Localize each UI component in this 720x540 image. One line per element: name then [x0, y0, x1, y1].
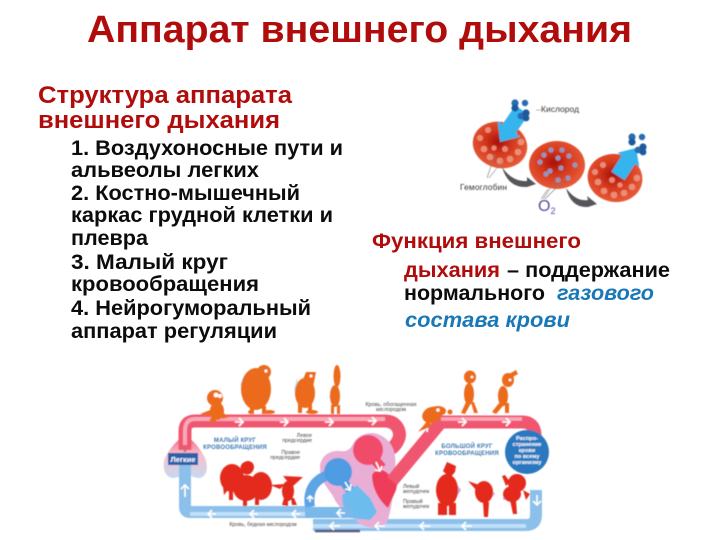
right ventricle	[342, 485, 377, 520]
oxygen molecules top	[511, 99, 530, 121]
list item 2	[71, 182, 333, 250]
orange character 4: thin	[329, 365, 340, 414]
callout: blood distribution: крови	[519, 448, 536, 454]
list item 1: 1. Воздухоносные пути и	[71, 137, 343, 160]
blue pipe: systemic return	[313, 490, 536, 525]
text block: function of external respiration: – поддержание	[507, 259, 670, 282]
orange character 1: sitting	[200, 390, 229, 423]
orange character 5: crawling	[418, 404, 452, 432]
arrow: oxygen leaving cell	[611, 148, 639, 180]
text block: function of external respiration: Функция внешнего	[372, 230, 581, 253]
blue pipe: pulmonary return	[185, 465, 310, 512]
labels: small diagram text	[203, 402, 499, 528]
red pipe: systemic circulation	[392, 422, 535, 481]
red blood cell 2	[529, 141, 585, 189]
heading: structure: внешнего дыхания	[38, 107, 280, 134]
list item 2: каркас грудной клетки и	[71, 204, 333, 227]
arrow: oxygen entering cell	[498, 106, 529, 142]
label: right atrium: предсердие	[270, 455, 300, 461]
red character standing	[436, 462, 461, 515]
label: right ventricle: желудочек	[403, 504, 430, 510]
blue pipe over heart	[305, 507, 353, 518]
label: left atrium: Левое	[297, 433, 312, 439]
red character reaching	[468, 481, 495, 517]
list item 1	[71, 137, 343, 182]
callout: blood distribution: странение	[513, 442, 541, 448]
grey arrow 1	[502, 167, 536, 187]
label: right atrium: Правое	[281, 450, 300, 456]
red pipe: pulmonary circulation	[185, 421, 399, 453]
title: Аппарат внешнего дыхания	[87, 9, 632, 51]
label: pulmonary circulation	[203, 436, 267, 451]
label: left ventricle: Левый	[403, 483, 419, 490]
label: systemic circulation: БОЛЬШОЙ КРУГ	[441, 442, 493, 450]
label: hemoglobin: Гемоглобин	[460, 182, 507, 192]
label: right ventricle: Правый	[403, 498, 423, 505]
list item 4: 4. Нейрогуморальный	[71, 297, 311, 320]
label box: lungs: Легкие	[170, 455, 196, 464]
list item 2: 2. Костно-мышечный	[71, 182, 300, 205]
heading: structure: Структура аппарата	[38, 82, 293, 109]
label: left ventricle: желудочек	[403, 489, 430, 495]
leader lines	[487, 110, 566, 199]
callout: blood distribution: организму	[513, 460, 542, 466]
blue arch	[309, 474, 332, 507]
label: right atrium	[270, 450, 300, 461]
label: O2: O	[538, 198, 550, 215]
left ventricle	[372, 470, 400, 508]
text block: structure of the respiratory apparatus	[38, 82, 343, 343]
label: systemic circulation: КРОВООБРАЩЕНИЯ	[435, 451, 499, 457]
illustration: hemoglobin and oxygen	[460, 99, 647, 216]
flow arrows	[181, 417, 541, 530]
label: pulmonary circulation: КРОВООБРАЩЕНИЯ	[203, 445, 267, 451]
heart body	[320, 433, 395, 527]
text block: function of external respiration: газового	[557, 282, 654, 305]
list item 3: 3. Малый круг	[71, 251, 228, 274]
orange character 2: large	[240, 365, 275, 414]
label: left atrium: предсердие	[282, 438, 312, 444]
callout: blood distribution	[505, 430, 549, 474]
list item 3	[71, 251, 259, 296]
list item 2: плевра	[71, 227, 148, 250]
text block: function of external respiration: состава крови	[405, 309, 570, 332]
list item 4: аппарат регуляции	[71, 320, 277, 343]
callout: blood distribution: Распро-	[516, 436, 538, 442]
label: oxygen-rich blood: кислородом	[376, 407, 406, 413]
orange character 3: walking	[294, 372, 318, 414]
text block: function of external respiration	[372, 230, 670, 332]
label: left ventricle	[403, 483, 430, 495]
text block: function of external respiration: дыхания	[404, 259, 500, 282]
orange character 7: walking	[492, 370, 518, 414]
list item 3: кровообращения	[71, 273, 259, 296]
list item 1: альвеолы легких	[71, 159, 259, 182]
lungs	[164, 430, 207, 478]
label: oxygen: Кислород	[541, 104, 579, 114]
left atrium	[353, 435, 383, 465]
label: left atrium	[282, 433, 312, 444]
list item 4	[71, 297, 311, 343]
text block: function of external respiration: нормального	[404, 282, 545, 305]
label box: lungs	[168, 453, 198, 465]
right atrium	[324, 458, 352, 486]
label: oxygen-poor blood: Кровь, бедная кислородом	[229, 522, 297, 528]
red blood cell 1	[467, 116, 533, 174]
diagram: blood circulation	[164, 365, 549, 531]
red character pointing	[270, 476, 303, 506]
red character pair	[220, 461, 272, 506]
label: oxygen-rich blood: Кровь, обогащенная	[366, 402, 417, 408]
grey arrow 2	[566, 188, 597, 207]
label: oxygen-rich blood	[366, 402, 417, 413]
oxygen molecules right	[628, 133, 647, 155]
heading: structure	[38, 82, 293, 134]
red blood cell 3	[584, 150, 646, 206]
heart	[309, 433, 400, 527]
label: systemic circulation	[435, 442, 499, 457]
red character with raised arm	[502, 474, 530, 514]
orange character 6: walking	[461, 370, 478, 414]
label: pulmonary circulation: МАЛЫЙ КРУГ	[214, 436, 256, 444]
label: O2: 2	[550, 206, 555, 216]
callout: blood distribution: по всему	[515, 454, 540, 460]
label: right ventricle	[403, 498, 430, 510]
